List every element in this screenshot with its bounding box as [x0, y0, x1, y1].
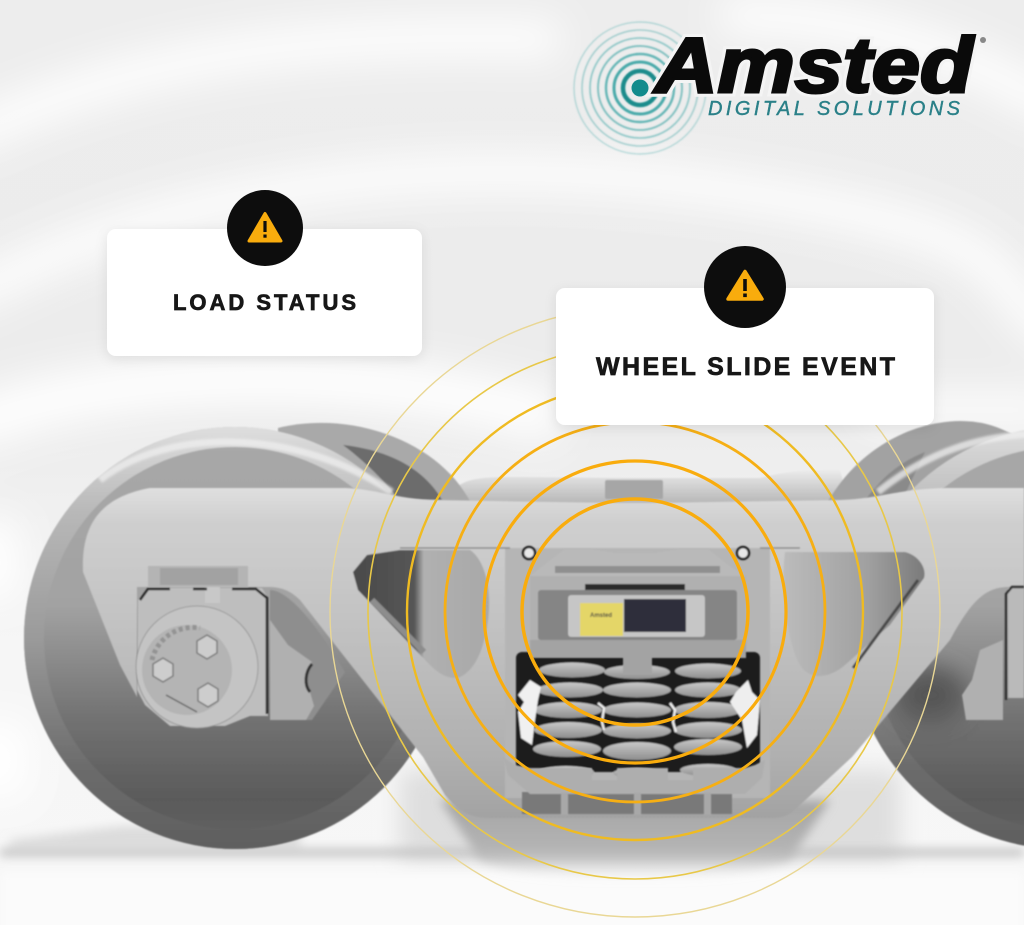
- axle bolt: [153, 658, 173, 682]
- friction wedge left: [518, 680, 541, 745]
- registered mark: [980, 37, 986, 43]
- bearing adapter right: [962, 587, 1024, 720]
- logo wordmark halo: Amsted: [653, 21, 974, 109]
- logo: [574, 21, 986, 154]
- icon: load status warning: [227, 190, 303, 266]
- bolster with sensor pocket: [523, 547, 749, 674]
- frame window right: [784, 552, 925, 676]
- logo subtitle: DIGITAL SOLUTIONS: [708, 98, 961, 120]
- spring column centre: [603, 665, 671, 778]
- spring plate: [503, 757, 765, 815]
- spring column right: [674, 664, 742, 776]
- icon: wheel slide warning: [704, 246, 786, 328]
- card: wheel slide event: [556, 288, 934, 425]
- load status label: LOAD STATUS: [173, 290, 356, 315]
- sensor yellow label: [580, 603, 623, 636]
- axle bolt: [197, 635, 217, 659]
- side frame: [83, 488, 1024, 818]
- card: load status: [107, 229, 422, 356]
- sensor device: Amsted: [590, 613, 612, 619]
- axle bolt: [198, 683, 218, 707]
- friction wedge right: [730, 680, 760, 748]
- centre pillar: [505, 548, 770, 798]
- centre clip left: [598, 703, 604, 730]
- sensor device: [568, 595, 705, 637]
- signal rings: [330, 307, 940, 917]
- logo centre dot: [632, 80, 648, 96]
- bearing adapter left: [136, 566, 345, 728]
- wheel slide label: WHEEL SLIDE EVENT: [596, 353, 895, 381]
- logo rings: [574, 22, 706, 154]
- logo wordmark: Amsted: [653, 21, 974, 109]
- sensor dark panel: [624, 599, 686, 632]
- front wheel left: [24, 427, 446, 849]
- rear wheels and bolster: [278, 421, 1012, 505]
- front wheel right: [851, 427, 1024, 849]
- spring column left: [533, 662, 605, 778]
- ground and shadow: [0, 770, 1024, 925]
- frame window left: [353, 550, 489, 678]
- centre clip right: [670, 703, 676, 732]
- spring group: [516, 652, 760, 778]
